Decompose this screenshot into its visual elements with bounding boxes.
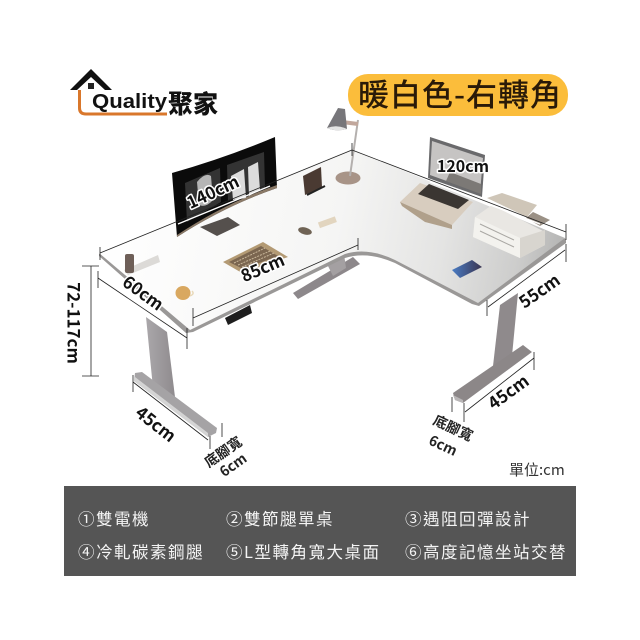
dimension: 60cm: 60cm — [118, 268, 170, 315]
feature 1: ①雙電機 — [78, 506, 150, 530]
tablet holder — [303, 167, 325, 195]
laptop on stand — [400, 137, 485, 229]
dimension: right foot 45cm — [465, 352, 534, 414]
dimension: 85cm — [193, 238, 358, 326]
logo: Quality 聚家 — [70, 69, 218, 121]
feature 5: ⑤L型轉角寬大桌面 — [226, 539, 380, 563]
desk leg: right — [453, 293, 532, 403]
phone — [452, 260, 482, 278]
dimension: right foot width 6cm: 6cm — [426, 430, 461, 461]
dimension: right foot width 6cm: 底腳寬 — [430, 410, 476, 446]
dimension: 55cm: 55cm — [513, 267, 564, 313]
control panel — [225, 305, 252, 325]
small accessories: pen holder, notes, mouse, cup — [124, 216, 337, 300]
dimension: 120cm: 120cm — [437, 153, 489, 177]
desk top: L-shaped panel — [99, 149, 566, 333]
dimension: 55cm — [487, 244, 566, 316]
dimension: 120cm — [352, 143, 566, 240]
dimension: 85cm: 85cm — [236, 246, 288, 287]
feature 4: ④冷軋碳素鋼腿 — [78, 539, 204, 563]
dimension: 140cm — [100, 150, 352, 260]
monitor — [172, 137, 277, 237]
dimension: 60cm — [98, 268, 187, 349]
dimension: right foot 45cm: 45cm — [482, 367, 533, 414]
dimension: height 72-117cm — [62, 266, 99, 376]
feature 2: ②雙節腿單桌 — [226, 506, 334, 530]
panel: feature list — [64, 486, 576, 576]
feature 6: ⑥高度記憶坐站交替 — [405, 539, 567, 563]
dimension: 140cm: 140cm — [182, 168, 243, 214]
unit note: 單位:cm — [509, 459, 565, 480]
desk leg: middle — [293, 254, 360, 299]
dimension: left foot width 6cm: 6cm — [215, 448, 251, 481]
badge: colour and corner direction: 暖白色-右轉角 — [358, 70, 561, 115]
keyboard — [223, 242, 288, 273]
dimension: height 72-117cm: 72-117cm — [62, 282, 88, 364]
desk lamp — [327, 108, 360, 184]
printer — [473, 193, 550, 258]
dimension: right foot width 6cm — [426, 397, 476, 461]
dimension: left foot 45cm — [131, 375, 208, 447]
feature 3: ③遇阻回彈設計 — [405, 506, 531, 530]
logo: Quality 聚家: Quality — [92, 91, 168, 113]
logo: Quality 聚家: 聚家 — [168, 85, 218, 121]
dimension: left foot width 6cm — [200, 423, 251, 481]
dimension: left foot width 6cm: 底腳寬 — [200, 432, 246, 472]
desk leg: left front — [134, 317, 217, 437]
dimension: left foot 45cm: 45cm — [131, 399, 182, 447]
